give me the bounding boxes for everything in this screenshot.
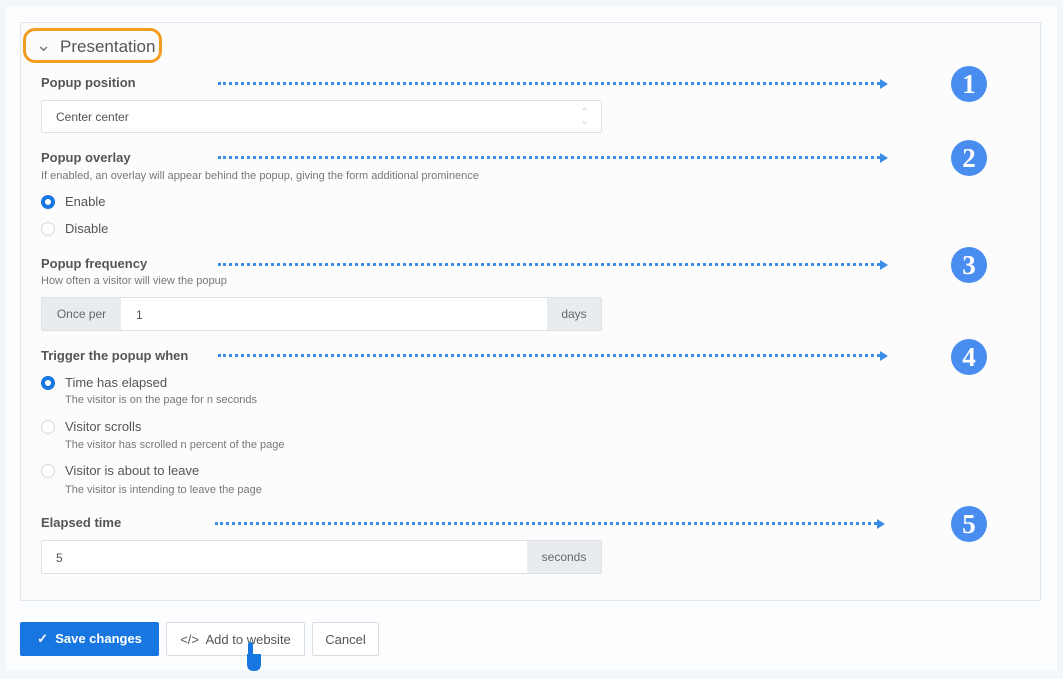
badge 2: 2: [962, 142, 976, 172]
badge 1: [951, 66, 987, 102]
arrow 3: [218, 260, 888, 270]
badge 3: [951, 247, 987, 283]
arrow 4: [218, 351, 888, 361]
field: trigger: Trigger the popup when: [41, 348, 188, 363]
field: popup overlay: Disable: [65, 221, 108, 236]
button: save changes: ✓ Save changes: [37, 631, 142, 646]
heading: Presentation: ⌄: [36, 35, 51, 55]
field: popup position: ⌃: [581, 107, 589, 118]
field: popup position: ⌄: [581, 116, 589, 127]
field: popup overlay: Enable: [65, 194, 105, 209]
field: trigger: Visitor scrolls: [65, 419, 141, 434]
field: popup overlay: If enabled, an overlay will appear behind the popup, giving the form additional prominence: [41, 170, 479, 182]
field: elapsed time: seconds: [542, 550, 586, 564]
field: popup overlay: [41, 150, 479, 236]
arrow 5: [215, 519, 885, 529]
field: popup position: Center center: [56, 110, 129, 124]
badge 1: 1: [962, 68, 976, 98]
heading: Presentation: [23, 28, 162, 63]
field: trigger: [41, 348, 285, 496]
field: trigger: The visitor is intending to leave the page: [65, 484, 262, 496]
badge 5: 5: [962, 508, 976, 538]
field: popup overlay: Popup overlay: [41, 150, 131, 165]
button: cancel: Cancel: [325, 632, 366, 646]
arrow 1: [218, 79, 888, 89]
field: trigger: Visitor is about to leave: [65, 463, 199, 478]
badge 5: [951, 506, 987, 542]
field: popup position: [41, 75, 602, 133]
field: trigger: The visitor is on the page for n seconds: [65, 394, 257, 406]
field: popup frequency: How often a visitor will view the popup: [41, 275, 227, 287]
field: elapsed time: 5: [56, 551, 63, 565]
icon: hand cursor: [247, 642, 261, 671]
arrow 2: [218, 153, 888, 163]
field: trigger: Time has elapsed: [65, 375, 167, 390]
button: cancel: [312, 622, 379, 656]
button: add to website: </> Add to website: [180, 632, 291, 646]
heading: Presentation: Presentation: [60, 37, 155, 56]
field: elapsed time: Elapsed time: [41, 515, 121, 530]
field: popup frequency: days: [561, 307, 587, 321]
field: popup position: Popup position: [41, 75, 136, 90]
badge 4: 4: [962, 342, 976, 372]
badge 3: 3: [962, 250, 976, 280]
field: elapsed time: [41, 515, 602, 574]
badge 2: [951, 140, 987, 176]
field: popup frequency: [41, 256, 602, 331]
field: trigger: The visitor has scrolled n percent of the page: [65, 439, 285, 451]
field: popup frequency: Popup frequency: [41, 256, 147, 271]
field: popup frequency: Once per: [57, 307, 106, 321]
button: add to website: [166, 622, 305, 656]
field: popup frequency: 1: [136, 308, 143, 322]
button: save changes: [20, 622, 159, 656]
badge 4: [951, 339, 987, 375]
